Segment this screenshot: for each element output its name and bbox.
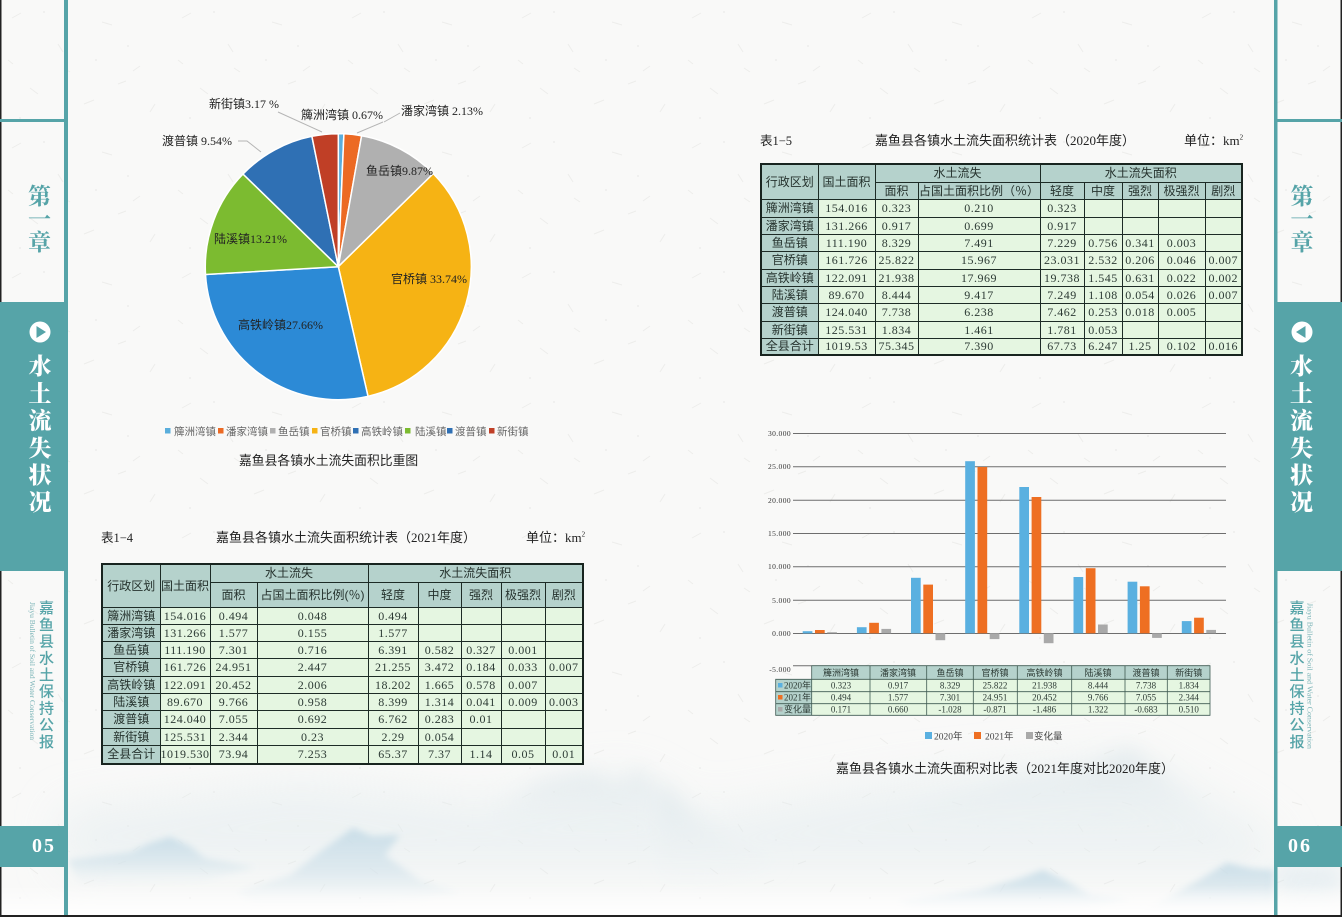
publication name: 嘉鱼县水土保持公报 xyxy=(1288,600,1304,750)
table 1-5: 2020 soil erosion area: 水土流失 xyxy=(934,166,982,180)
table 1-4: 2021 soil erosion area: 2.006 xyxy=(298,678,327,692)
pie chart legend: 簰洲湾镇 xyxy=(174,425,216,438)
right sidebar xyxy=(1274,0,1342,915)
table 1-5: 2020 soil erosion area: 1.25 xyxy=(1129,339,1152,353)
table 1-5: 2020 soil erosion area: 0.253 xyxy=(1088,305,1118,319)
pie chart: share of soil erosion area by town: 鱼岳镇9.87% xyxy=(366,164,433,178)
pie chart legend: 渡普镇 xyxy=(455,425,487,438)
table 1-5: 2020 soil erosion area: 鱼岳镇 xyxy=(772,236,808,250)
table 1-5: 2020 soil erosion area xyxy=(760,163,1243,356)
table 1-4: 2021 soil erosion area: 65.37 xyxy=(378,747,408,761)
chart data table: 官桥镇 xyxy=(981,667,1009,678)
chart data table: 21.938 xyxy=(1032,680,1057,690)
table 1-4: 2021 soil erosion area: 0.494 xyxy=(219,608,248,622)
table 1-4: 2021 soil erosion area: 111.190 xyxy=(164,642,206,656)
bars: change xyxy=(827,624,1216,643)
section title: 水土流失状况 xyxy=(1285,354,1318,517)
chapter label: 第一章 xyxy=(1286,184,1318,253)
table 1-4: 2021 soil erosion area: 潘家湾镇 xyxy=(107,626,155,640)
chart data table: 2.344 xyxy=(1179,692,1199,702)
table 1-4: 2021 soil erosion area: 占国土面积比例(％) xyxy=(260,588,364,602)
table 1-5: 2020 soil erosion area: 124.040 xyxy=(825,305,868,319)
table 1-4: 2021 soil erosion area: 0.23 xyxy=(301,730,324,744)
pie chart: share of soil erosion area by town: 陆溪镇13.21% xyxy=(214,231,287,246)
table 1-5: 2020 soil erosion area: 7.229 xyxy=(1047,236,1077,250)
table 1-5: 2020 soil erosion area: 2.532 xyxy=(1088,253,1118,267)
table 1-4: 2021 soil erosion area: 0.716 xyxy=(298,642,327,656)
table 1-4: 2021 soil erosion area: 0.283 xyxy=(425,712,454,726)
table 1-4: 2021 soil erosion area: 6.391 xyxy=(378,642,408,656)
table 1-5: 2020 soil erosion area: 轻度 xyxy=(1050,184,1074,198)
pie chart legend xyxy=(165,425,529,438)
left sidebar xyxy=(0,0,68,915)
table 1-5: 2020 soil erosion area: 极强烈 xyxy=(1164,184,1200,198)
table 1-5: 2020 soil erosion area: 新街镇 xyxy=(772,322,808,336)
table 1-5: 2020 soil erosion area: 131.266 xyxy=(825,218,868,232)
table 1-4: 2021 soil erosion area: 1.577 xyxy=(219,626,248,640)
bottom frame line xyxy=(0,915,1342,917)
table 1-5: 2020 soil erosion area: 111.190 xyxy=(826,236,867,250)
table 1-5: 2020 soil erosion area: 17.969 xyxy=(961,270,997,284)
table 1-4: 2021 soil erosion area: 行政区划 xyxy=(107,579,155,593)
table 1-5: 2020 soil erosion area: 23.031 xyxy=(1044,253,1080,267)
table 1-4: 2021 soil erosion area: 0.155 xyxy=(298,626,327,640)
chart data table: 簰洲湾镇 xyxy=(823,667,859,678)
table 1-4 unit: 单位：km2 xyxy=(526,530,585,545)
table 1-4: 2021 soil erosion area: 国土面积 xyxy=(161,579,209,593)
chart data table: 9.766 xyxy=(1088,692,1109,702)
pie chart legend: 陆溪镇 xyxy=(415,425,447,438)
table 1-4: 2021 soil erosion area: 3.472 xyxy=(425,660,454,674)
table 1-4: 2021 soil erosion area: 剧烈 xyxy=(552,588,576,602)
chart data table: 陆溪镇 xyxy=(1084,667,1112,678)
table 1-4: 2021 soil erosion area: 6.762 xyxy=(378,712,408,726)
table 1-4: 2021 soil erosion area: 7.055 xyxy=(219,712,248,726)
table 1-5: 2020 soil erosion area: 强烈 xyxy=(1128,184,1152,198)
left sidebar: Jiayu Bulletin of Soil and Water Conservation xyxy=(28,602,37,740)
table 1-5: 2020 soil erosion area: 0.053 xyxy=(1088,322,1118,336)
table 1-5: 2020 soil erosion area: 25.822 xyxy=(878,253,914,267)
axis labels: 15.000 xyxy=(768,529,791,538)
table 1-5: 2020 soil erosion area: 0.917 xyxy=(1047,218,1077,232)
table 1-5: 2020 soil erosion area: 高铁岭镇 xyxy=(766,270,814,284)
table 1-4: 2021 soil erosion area: 24.951 xyxy=(216,660,252,674)
table 1-4: 2021 soil erosion area: 渡普镇 xyxy=(113,712,149,726)
page number: 06 xyxy=(1288,835,1312,857)
table 1-5: 2020 soil erosion area: 官桥镇 xyxy=(772,253,808,267)
table 1-5: 2020 soil erosion area: 154.016 xyxy=(825,201,868,215)
axis labels: 20.000 xyxy=(768,496,791,505)
pie chart caption: 嘉鱼县各镇水土流失面积比重图 xyxy=(239,454,418,468)
pie chart: share of soil erosion area by town: 渡普镇 9.54% xyxy=(162,133,232,148)
table 1-5: 2020 soil erosion area: 陆溪镇 xyxy=(772,288,808,302)
table 1-4: 2021 soil erosion area: 154.016 xyxy=(164,608,206,622)
chart data table: 2021年 xyxy=(784,692,811,702)
chart data table: 25.822 xyxy=(983,680,1007,690)
chart data table: 潘家湾镇 xyxy=(880,667,916,678)
table 1-5: 2020 soil erosion area: 0.007 xyxy=(1209,253,1238,267)
table 1-5: 2020 soil erosion area: 簰洲湾镇 xyxy=(766,201,814,215)
chart data table: -0.871 xyxy=(983,704,1007,714)
table 1-5: 2020 soil erosion area: 0.206 xyxy=(1125,253,1155,267)
table 1-4: 2021 soil erosion area: 0.582 xyxy=(425,642,454,656)
table 1-4: 2021 soil erosion area: 9.766 xyxy=(219,694,248,708)
table 1-4: 2021 soil erosion area: 中度 xyxy=(428,588,452,602)
table 1-5: 2020 soil erosion area: 125.531 xyxy=(825,322,868,336)
chart data table: -0.683 xyxy=(1134,704,1158,714)
table 1-5: 2020 soil erosion area: 15.967 xyxy=(961,253,997,267)
table 1-5: 2020 soil erosion area: 剧烈 xyxy=(1211,184,1235,198)
table 1-5: 2020 soil erosion area: 水土流失面积 xyxy=(1105,166,1177,180)
table 1-4: 2021 soil erosion area: 125.531 xyxy=(164,730,206,744)
table 1-4 title: 嘉鱼县各镇水土流失面积统计表（2021年度） xyxy=(216,530,476,545)
table 1-4: 2021 soil erosion area: 1.14 xyxy=(470,747,493,761)
table 1-4: 2021 soil erosion area: 0.958 xyxy=(298,694,327,708)
table 1-5: 2020 soil erosion area: 0.323 xyxy=(1047,201,1077,215)
table 1-4: 2021 soil erosion area: 7.37 xyxy=(428,747,451,761)
table 1-5: 2020 soil erosion area: 行政区划 xyxy=(766,175,814,189)
table 1-5: 2020 soil erosion area: 0.210 xyxy=(964,201,994,215)
table 1-4: 2021 soil erosion area: 131.266 xyxy=(164,626,206,640)
table 1-5: 2020 soil erosion area: 1.545 xyxy=(1088,270,1118,284)
table 1-4: 2021 soil erosion area: 8.399 xyxy=(378,694,408,708)
table 1-4: 2021 soil erosion area: 2.29 xyxy=(382,730,405,744)
table 1-5: 2020 soil erosion area: 7.462 xyxy=(1047,305,1077,319)
table 1-4: 2021 soil erosion area: 73.94 xyxy=(219,747,248,761)
publication name: 嘉鱼县水土保持公报 xyxy=(37,600,54,750)
table 1-4: 2021 soil erosion area: 水土流失 xyxy=(265,566,313,580)
table 1-4: 2021 soil erosion area: 极强烈 xyxy=(505,588,541,602)
axis labels: 10.000 xyxy=(768,562,791,571)
table 1-4: 2021 soil erosion area: 0.01 xyxy=(470,712,493,726)
table 1-4: 2021 soil erosion area: 高铁岭镇 xyxy=(107,678,155,692)
table 1-4: 2021 soil erosion area: 0.041 xyxy=(466,694,496,708)
chart data table: 0.660 xyxy=(888,704,909,714)
table 1-5: 2020 soil erosion area: 0.026 xyxy=(1167,288,1196,302)
chart data table: 0.494 xyxy=(831,692,852,702)
table 1-5: 2020 soil erosion area: 0.007 xyxy=(1209,288,1238,302)
table 1-4: 2021 soil erosion area: 0.054 xyxy=(425,730,454,744)
table 1-5 unit: 单位：km2 xyxy=(1184,133,1243,148)
table 1-5: 2020 soil erosion area: 6.247 xyxy=(1088,339,1118,353)
chart data table: 渡普镇 xyxy=(1132,667,1160,678)
table 1-4: 2021 soil erosion area xyxy=(101,563,584,765)
table 1-4: 2021 soil erosion area: 20.452 xyxy=(216,678,252,692)
axis labels: 5.000 xyxy=(772,596,791,605)
axis labels: 30.000 xyxy=(768,429,791,438)
table 1-4: 2021 soil erosion area: 0.05 xyxy=(512,747,535,761)
table 1-4: 2021 soil erosion area: 0.01 xyxy=(552,747,575,761)
table 1-4: 2021 soil erosion area: 1.314 xyxy=(425,694,454,708)
table 1-4: 2021 soil erosion area: 0.184 xyxy=(466,660,496,674)
bar chart legend: 2021年 xyxy=(985,730,1014,742)
table 1-5: 2020 soil erosion area: 0.054 xyxy=(1125,288,1155,302)
table 1-5: 2020 soil erosion area: 0.016 xyxy=(1209,339,1238,353)
chart data table: 8.444 xyxy=(1088,680,1109,690)
table 1-5: 2020 soil erosion area: 国土面积 xyxy=(822,175,870,189)
table 1-4: 2021 soil erosion area: 0.009 xyxy=(508,694,538,708)
table 1-5: 2020 soil erosion area: 122.091 xyxy=(825,270,868,284)
table 1-5: 2020 soil erosion area: 0.102 xyxy=(1167,339,1196,353)
chart data table: -1.486 xyxy=(1033,704,1057,714)
table 1-4 number: 表1−4 xyxy=(101,531,133,545)
pie chart: share of soil erosion area by town: 新街镇3.17 % xyxy=(209,96,279,111)
table 1-5: 2020 soil erosion area: 8.444 xyxy=(882,288,911,302)
table 1-4: 2021 soil erosion area: 2.344 xyxy=(219,730,248,744)
table 1-4: 2021 soil erosion area: 鱼岳镇 xyxy=(113,642,149,656)
pie chart legend: 官桥镇 xyxy=(320,425,352,438)
table 1-5: 2020 soil erosion area: 67.73 xyxy=(1047,339,1077,353)
bar chart legend: 变化量 xyxy=(1034,730,1063,742)
table 1-5: 2020 soil erosion area: 0.323 xyxy=(882,201,911,215)
table 1-4: 2021 soil erosion area: 轻度 xyxy=(381,588,405,602)
table 1-4: 2021 soil erosion area: 89.670 xyxy=(167,694,203,708)
chapter label: 第一章 xyxy=(23,184,56,253)
chart data table: 变化量 xyxy=(784,704,811,714)
bar chart legend: 2020年 xyxy=(934,730,963,742)
chart data table: 24.951 xyxy=(983,692,1007,702)
table 1-5: 2020 soil erosion area: 7.390 xyxy=(964,339,994,353)
table 1-4: 2021 soil erosion area: 0.033 xyxy=(508,660,538,674)
bars: 2021 xyxy=(815,467,1204,633)
table 1-5: 2020 soil erosion area: 1.781 xyxy=(1047,322,1077,336)
pie chart: share of soil erosion area by town: 官桥镇 33.74% xyxy=(391,271,467,286)
bars: 2020 xyxy=(803,461,1192,633)
table 1-4: 2021 soil erosion area: 18.202 xyxy=(375,678,411,692)
table 1-4: 2021 soil erosion area: 陆溪镇 xyxy=(113,694,149,708)
table 1-5: 2020 soil erosion area: 0.003 xyxy=(1167,236,1196,250)
table 1-4: 2021 soil erosion area: 0.048 xyxy=(298,608,327,622)
axis labels: -5.000 xyxy=(769,665,791,674)
chart data table: 1.322 xyxy=(1088,704,1108,714)
table 1-4: 2021 soil erosion area: 0.692 xyxy=(298,712,327,726)
section title: 水土流失状况 xyxy=(24,354,56,517)
axis labels: 25.000 xyxy=(768,462,791,471)
table 1-5: 2020 soil erosion area: 渡普镇 xyxy=(772,305,808,319)
table 1-5: 2020 soil erosion area: 1.834 xyxy=(882,322,911,336)
table 1-4: 2021 soil erosion area: 122.091 xyxy=(164,678,206,692)
right sidebar: Jiayu Bulletin of Soil and Water Conservation xyxy=(1306,603,1314,749)
table 1-5: 2020 soil erosion area: 0.756 xyxy=(1088,236,1118,250)
table 1-5: 2020 soil erosion area: 0.341 xyxy=(1125,236,1155,250)
chart data table: 8.329 xyxy=(940,680,961,690)
table 1-5: 2020 soil erosion area: 0.917 xyxy=(882,218,911,232)
table 1-5: 2020 soil erosion area: 占国土面积比例（％） xyxy=(919,184,1039,198)
chart data table xyxy=(776,666,1210,715)
table 1-5: 2020 soil erosion area: 8.329 xyxy=(882,236,911,250)
table 1-5: 2020 soil erosion area: 1.461 xyxy=(964,322,994,336)
axis labels xyxy=(768,429,791,674)
table 1-4: 2021 soil erosion area: 0.327 xyxy=(466,642,496,656)
chart data table: 7.055 xyxy=(1136,692,1157,702)
table 1-4: 2021 soil erosion area: 124.040 xyxy=(164,712,206,726)
table 1-5: 2020 soil erosion area: 0.018 xyxy=(1125,305,1155,319)
chart data table: 0.510 xyxy=(1179,704,1199,714)
table 1-4: 2021 soil erosion area: 0.003 xyxy=(549,694,579,708)
table 1-5: 2020 soil erosion area: 0.022 xyxy=(1167,270,1196,284)
table 1-4: 2021 soil erosion area: 0.578 xyxy=(466,678,496,692)
table 1-4: 2021 soil erosion area: 1019.530 xyxy=(160,747,210,761)
table 1-5: 2020 soil erosion area: 89.670 xyxy=(828,288,864,302)
chart data table: 20.452 xyxy=(1032,692,1057,702)
table 1-5: 2020 soil erosion area: 6.238 xyxy=(964,305,994,319)
table 1-4: 2021 soil erosion area: 强烈 xyxy=(469,588,493,602)
table 1-5: 2020 soil erosion area: 161.726 xyxy=(825,253,868,267)
pie chart: share of soil erosion area by town: 潘家湾镇 2.13% xyxy=(401,103,483,118)
chart data table: 0.171 xyxy=(831,704,851,714)
table 1-4: 2021 soil erosion area: 161.726 xyxy=(164,660,206,674)
table 1-5: 2020 soil erosion area: 潘家湾镇 xyxy=(766,218,814,232)
table 1-4: 2021 soil erosion area: 7.253 xyxy=(298,747,327,761)
table 1-5: 2020 soil erosion area: 面积 xyxy=(884,184,908,198)
pie chart legend: 新街镇 xyxy=(497,425,529,438)
bar chart legend xyxy=(925,730,1063,742)
bar chart: 2020 vs 2021 comparison xyxy=(768,429,1226,716)
table 1-4: 2021 soil erosion area: 0.007 xyxy=(549,660,579,674)
table 1-5: 2020 soil erosion area: 19.738 xyxy=(1044,270,1080,284)
table 1-4: 2021 soil erosion area: 新街镇 xyxy=(113,730,149,744)
pie chart: share of soil erosion area by town: 簰洲湾镇 0.67% xyxy=(301,107,383,122)
table 1-5: 2020 soil erosion area: 75.345 xyxy=(878,339,914,353)
table 1-4: 2021 soil erosion area: 2.447 xyxy=(298,660,327,674)
table 1-5: 2020 soil erosion area: 0.046 xyxy=(1167,253,1196,267)
bar chart caption: 嘉鱼县各镇水土流失面积对比表（2021年度对比2020年度） xyxy=(836,761,1174,776)
pie chart legend: 高铁岭镇 xyxy=(361,425,403,438)
table 1-4: 2021 soil erosion area: 面积 xyxy=(221,588,246,602)
table 1-4: 2021 soil erosion area: 全县合计 xyxy=(107,747,155,761)
chart data table: 新街镇 xyxy=(1175,667,1202,678)
table 1-5: 2020 soil erosion area: 0.699 xyxy=(964,218,994,232)
table 1-4: 2021 soil erosion area: 簰洲湾镇 xyxy=(107,608,155,622)
chart data table: 鱼岳镇 xyxy=(936,667,964,678)
page number: 05 xyxy=(32,835,56,857)
table 1-5: 2020 soil erosion area: 0.631 xyxy=(1125,270,1155,284)
table 1-5: 2020 soil erosion area: 7.491 xyxy=(964,236,994,250)
pie chart legend: 鱼岳镇 xyxy=(278,425,310,438)
chart data table: -1.028 xyxy=(938,704,962,714)
table 1-5: 2020 soil erosion area: 0.002 xyxy=(1209,270,1238,284)
table 1-5: 2020 soil erosion area: 1.108 xyxy=(1088,288,1118,302)
table 1-5: 2020 soil erosion area: 7.249 xyxy=(1047,288,1077,302)
table 1-5: 2020 soil erosion area: 1019.53 xyxy=(825,339,868,353)
pie chart legend: 潘家湾镇 xyxy=(226,425,268,438)
table 1-4: 2021 soil erosion area: 官桥镇 xyxy=(113,660,149,674)
table 1-4: 2021 soil erosion area: 7.301 xyxy=(219,642,248,656)
table 1-5 number: 表1−5 xyxy=(760,134,792,148)
chart data table: 0.917 xyxy=(888,680,909,690)
pie chart: share of soil erosion area by town: 高铁岭镇27.66% xyxy=(238,317,323,332)
chart data table: 1.834 xyxy=(1179,680,1199,690)
table 1-5: 2020 soil erosion area: 21.938 xyxy=(878,270,914,284)
chart data table: 7.301 xyxy=(940,692,960,702)
chart data table: 高铁岭镇 xyxy=(1026,667,1063,678)
table 1-4: 2021 soil erosion area: 1.577 xyxy=(378,626,408,640)
chart data table: 1.577 xyxy=(888,692,909,702)
table 1-5: 2020 soil erosion area: 中度 xyxy=(1091,184,1115,198)
table 1-4: 2021 soil erosion area: 0.007 xyxy=(508,678,538,692)
table 1-5 title: 嘉鱼县各镇水土流失面积统计表（2020年度） xyxy=(875,133,1135,148)
chart data table: 2020年 xyxy=(784,680,811,690)
chart data table: 7.738 xyxy=(1136,680,1157,690)
table 1-4: 2021 soil erosion area: 21.255 xyxy=(375,660,411,674)
table 1-4: 2021 soil erosion area: 水土流失面积 xyxy=(439,566,511,580)
table 1-4: 2021 soil erosion area: 0.001 xyxy=(508,642,538,656)
table 1-5: 2020 soil erosion area: 0.005 xyxy=(1167,305,1196,319)
axis labels: 0.000 xyxy=(772,629,791,638)
chart data table: 0.323 xyxy=(831,680,852,690)
table 1-5: 2020 soil erosion area: 7.738 xyxy=(882,305,911,319)
table 1-5: 2020 soil erosion area: 全县合计 xyxy=(766,339,814,353)
table 1-4: 2021 soil erosion area: 1.665 xyxy=(425,678,454,692)
table 1-5: 2020 soil erosion area: 9.417 xyxy=(964,288,994,302)
table 1-4: 2021 soil erosion area: 0.494 xyxy=(378,608,408,622)
